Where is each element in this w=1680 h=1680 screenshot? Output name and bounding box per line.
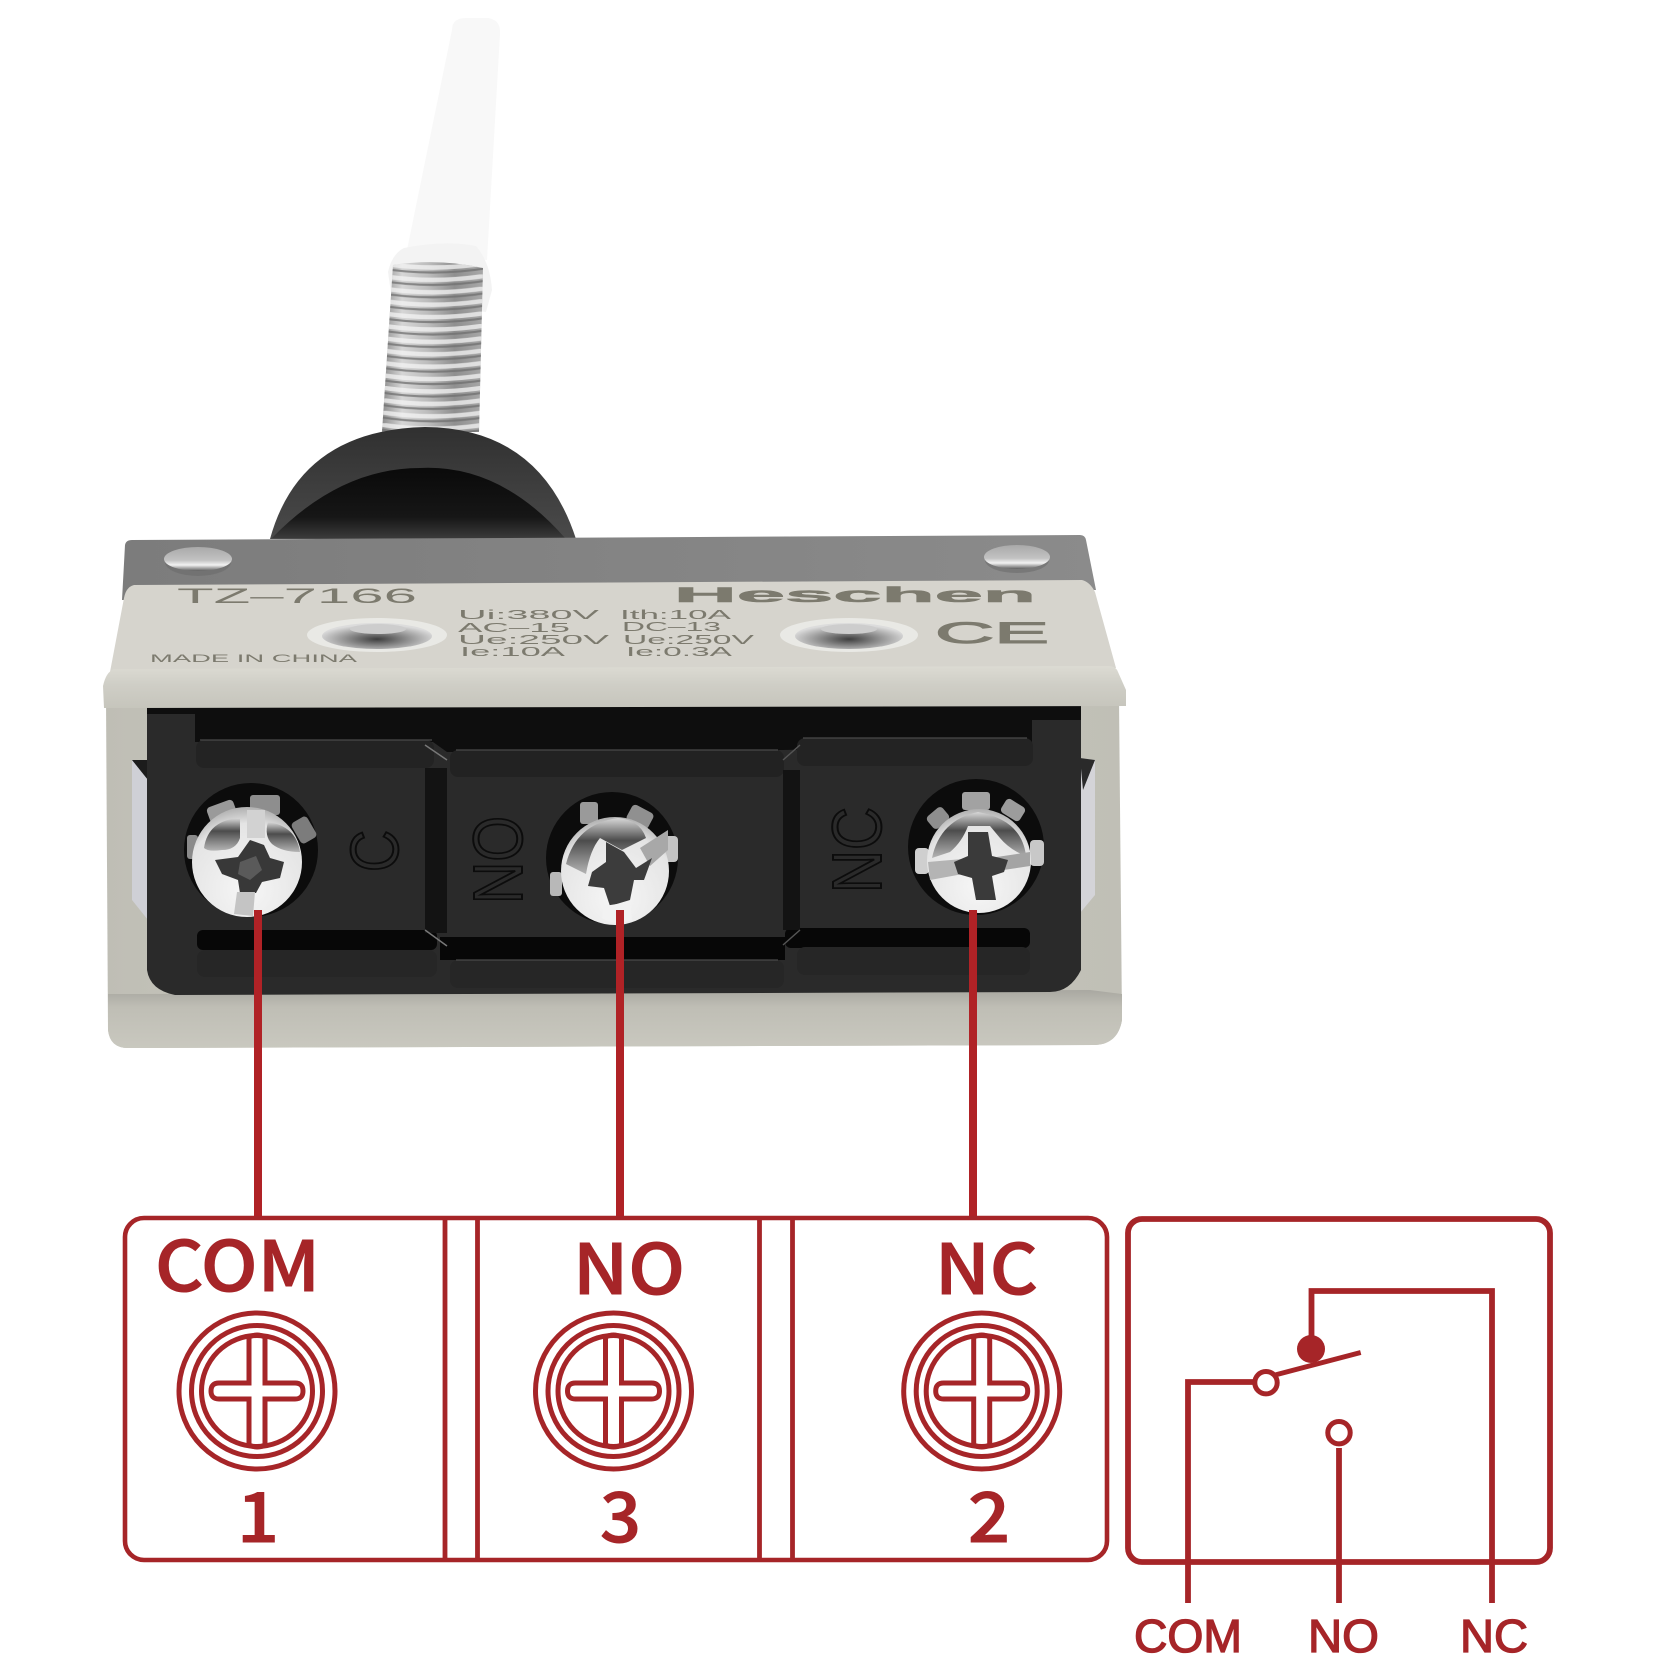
black rubber boot: [270, 427, 576, 539]
schematic COM: COM: [1134, 1610, 1242, 1662]
left top rail: [196, 740, 434, 768]
AC ratings: Ui:380V: [458, 608, 601, 622]
embossed C: C: [337, 830, 413, 872]
terminal labels: [155, 1211, 1038, 1562]
plunger: white tip and spring: [382, 18, 500, 432]
label NO: NO: [573, 1214, 685, 1314]
screw NC: [908, 779, 1044, 915]
terminal NC symbol: [904, 1313, 1060, 1469]
grey top plate: [122, 535, 1096, 600]
panel outline: [125, 1218, 1107, 1560]
NO path: [1336, 1448, 1342, 1603]
screw NO: [546, 792, 678, 925]
terminal NO symbol: [536, 1313, 692, 1469]
brand: Heschen: [674, 584, 1036, 607]
left bottom groove and rail: [197, 930, 437, 977]
model number: TZ–7166: [177, 585, 417, 608]
DC ratings: [620, 608, 756, 659]
DC ratings: Ie:0.3A: [626, 645, 734, 659]
schematic NC: NC: [1460, 1610, 1528, 1662]
wire NC: [969, 910, 977, 1218]
NC contact dot: [1297, 1335, 1325, 1363]
black terminal block: [147, 702, 1081, 995]
front lip: [103, 666, 1126, 708]
label NC: NC: [935, 1214, 1038, 1314]
wire NO: [616, 910, 624, 1218]
AC ratings: AC–15: [458, 621, 570, 635]
middle top rail: [450, 750, 784, 777]
eyelet left: [307, 618, 447, 652]
CE mark: CE: [935, 617, 1049, 650]
AC ratings: [458, 608, 611, 659]
right bottom groove and rail: [785, 928, 1030, 975]
NC path: [1312, 1291, 1492, 1603]
rivet right: [984, 545, 1050, 573]
schematic labels: [1134, 1610, 1528, 1662]
leader wires: [254, 910, 977, 1218]
switch photo: [103, 18, 1126, 1048]
number 1: 1: [237, 1462, 279, 1562]
left notch: [132, 760, 148, 920]
divider 1: [445, 1218, 478, 1560]
terminal COM symbol: [179, 1313, 335, 1469]
origin: MADE IN CHINA: [150, 653, 359, 665]
label COM: COM: [155, 1211, 320, 1311]
embossed NO: NO: [459, 816, 537, 904]
rivet left: [164, 547, 232, 576]
divider 2: [760, 1218, 792, 1560]
DC ratings: Ue:250V: [623, 633, 756, 647]
wire COM: [254, 910, 262, 1218]
AC ratings: Ue:250V: [458, 633, 611, 647]
terminal diagram panel: [125, 1218, 1107, 1560]
middle bottom groove and rail: [440, 937, 785, 988]
top dark band: [147, 702, 1081, 752]
lever arm: [1275, 1352, 1361, 1375]
DC ratings: Ith:10A: [620, 608, 733, 622]
number 3: 3: [600, 1462, 641, 1562]
circuit schematic panel: [1128, 1219, 1550, 1603]
COM path: [1188, 1382, 1254, 1603]
schematic NO: NO: [1308, 1610, 1379, 1662]
COM contact: [1255, 1372, 1277, 1394]
beige top face: [110, 580, 1116, 672]
right notch: [1080, 758, 1095, 913]
printed label text: [150, 584, 1049, 665]
eyelet right: [780, 618, 918, 652]
right top rail: [797, 738, 1033, 766]
beige frame sides and bottom: [106, 698, 1122, 1048]
number 2: 2: [968, 1462, 1010, 1562]
embossed NC: NC: [818, 807, 896, 893]
separators: [425, 745, 800, 946]
screw COM: [184, 783, 318, 917]
AC ratings: Ie:10A: [460, 645, 567, 659]
NO contact: [1328, 1422, 1350, 1444]
DC ratings: DC–13: [622, 620, 721, 634]
schematic outline: [1128, 1219, 1550, 1562]
